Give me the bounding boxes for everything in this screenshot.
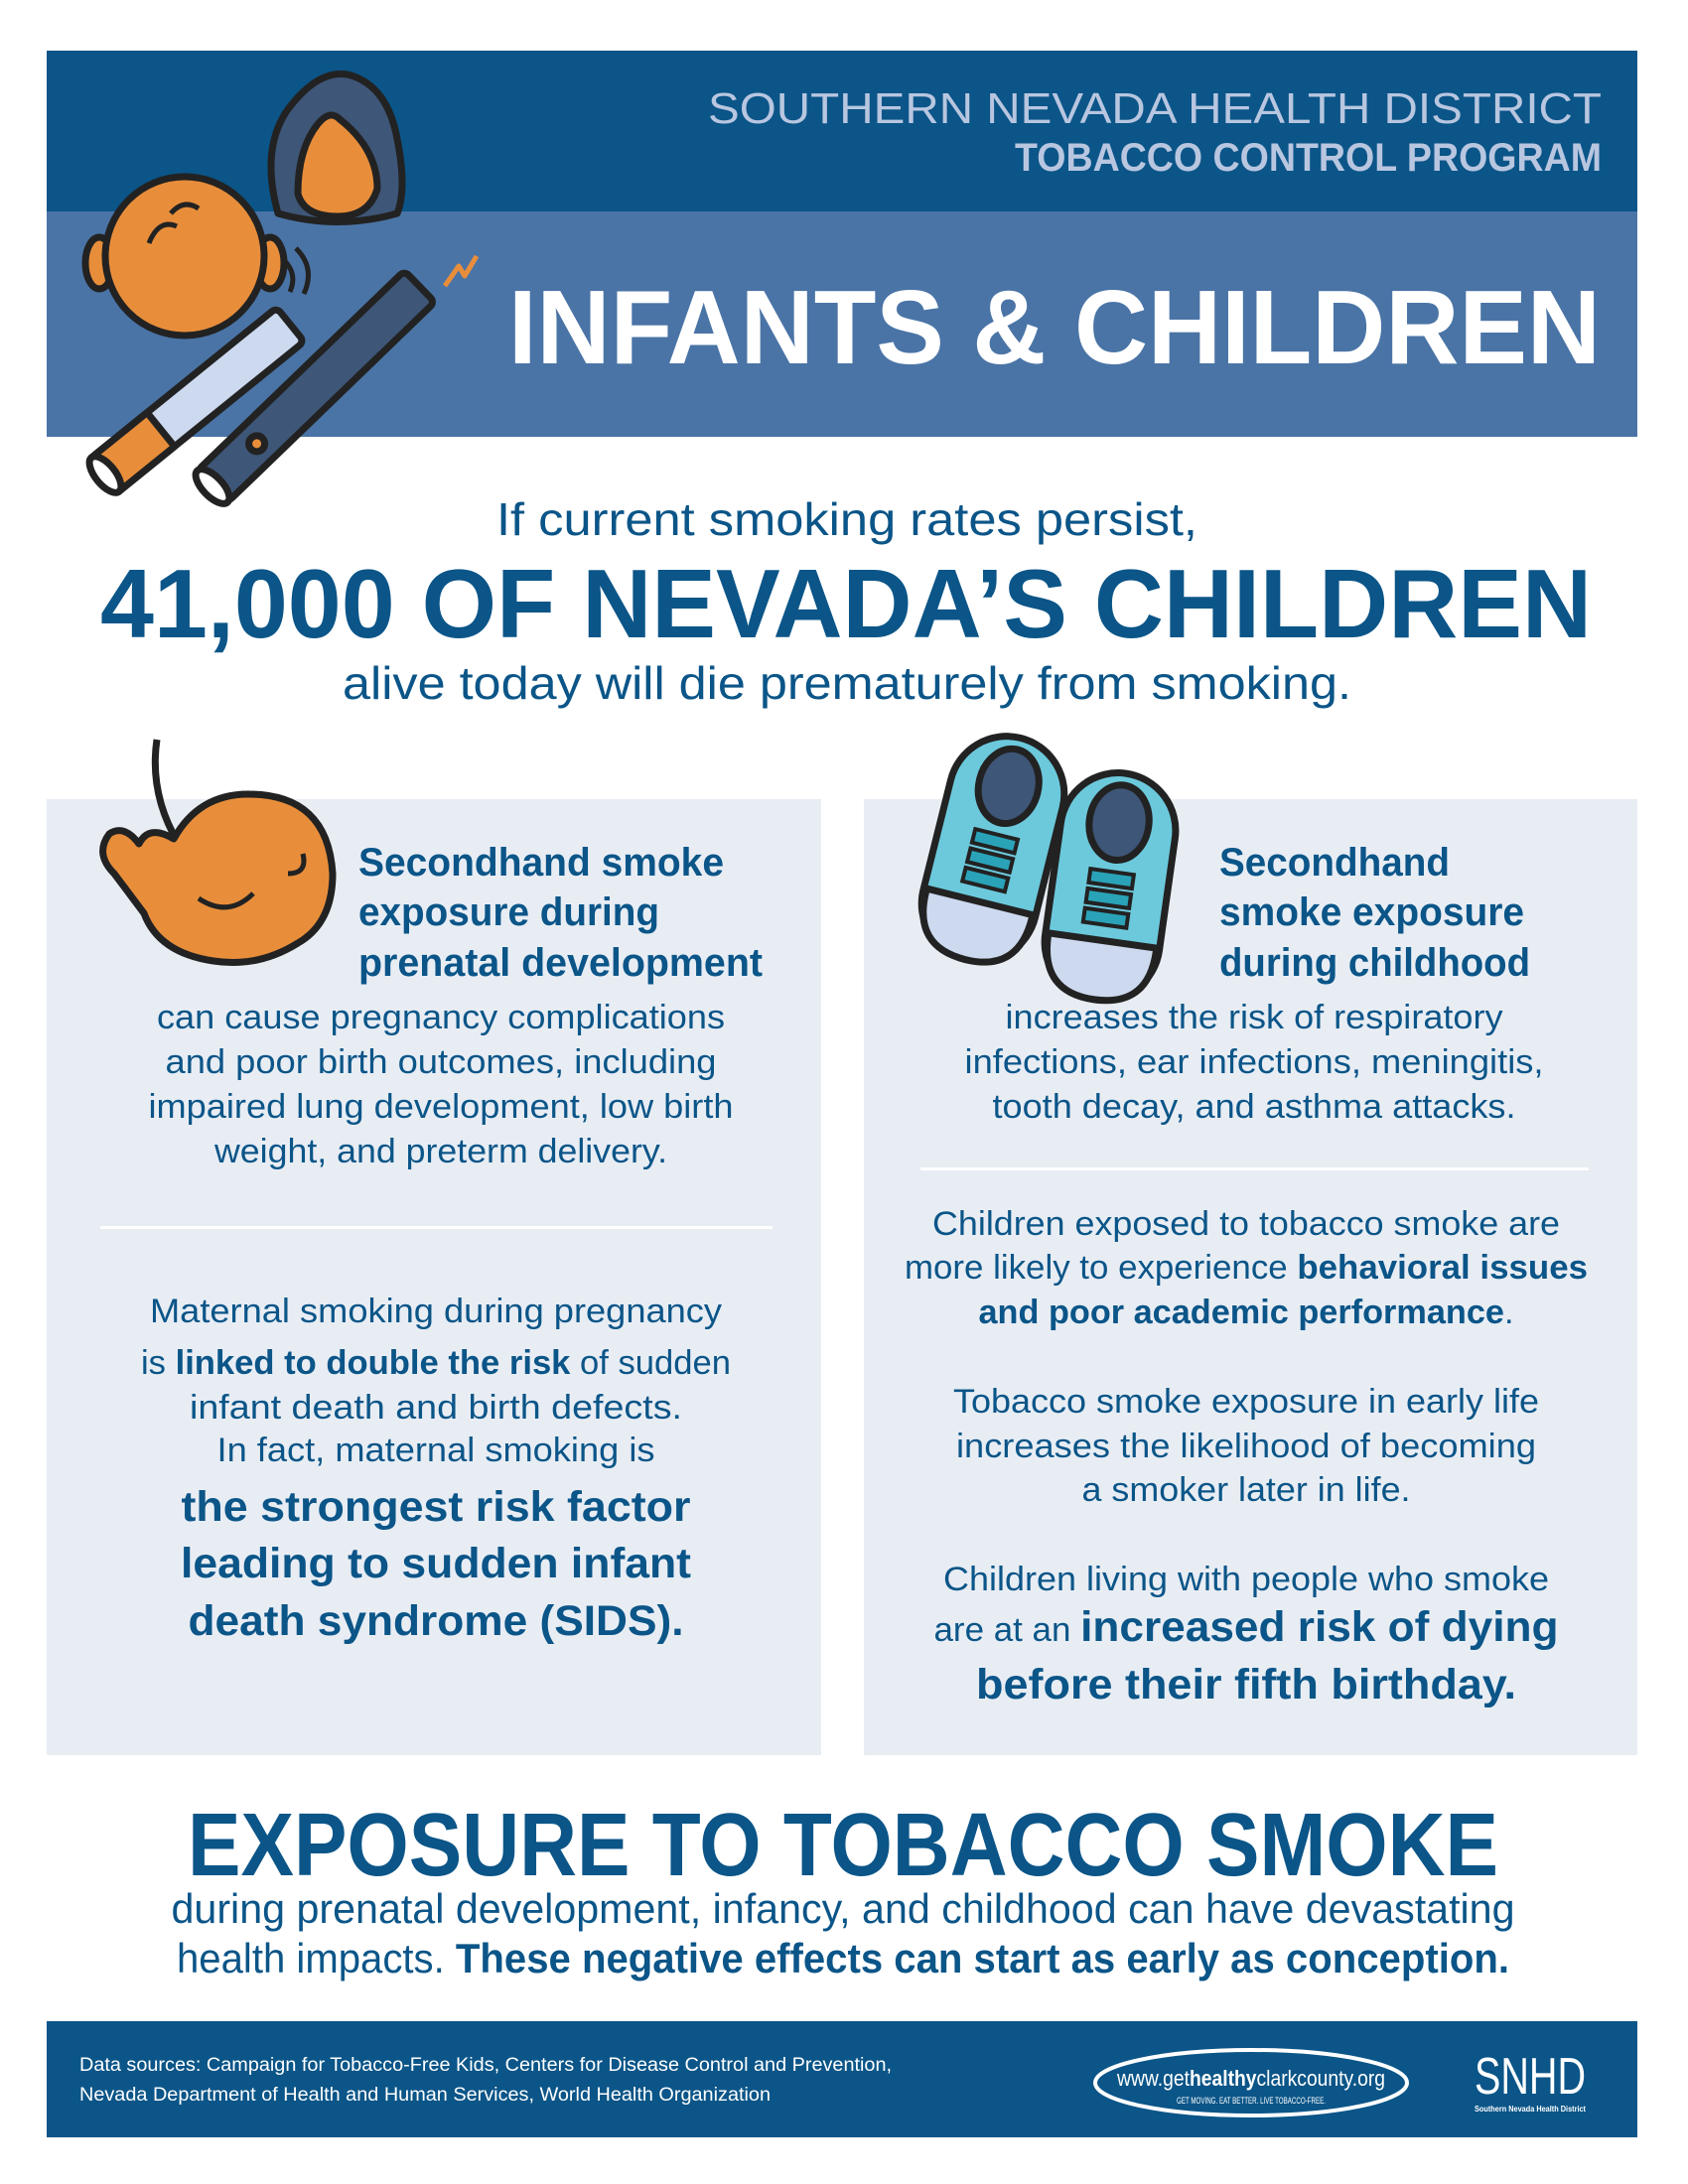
header program name: TOBACCO CONTROL PROGRAM xyxy=(1015,136,1602,180)
bottom text: during prenatal development, infancy, and childhood can have devastating xyxy=(171,1885,1515,1932)
body text: increases the risk of respiratory xyxy=(1005,999,1503,1036)
logo: gethealthyclarkcounty: GET MOVING. EAT BETTER. LIVE TOBACCO-FREE. xyxy=(1177,2096,1326,2106)
panel: prenatal xyxy=(47,740,821,1755)
heading xyxy=(1219,841,1530,985)
dying risk text: before their fifth birthday. xyxy=(976,1661,1516,1708)
SIDS callout: the strongest risk factor xyxy=(181,1483,691,1531)
smoker later text xyxy=(953,1383,1539,1509)
maternal smoking text: Maternal smoking during pregnancy xyxy=(150,1293,722,1330)
maternal smoking text xyxy=(141,1293,731,1469)
data sources: Nevada Department of Health and Human Services, World Health Organization xyxy=(79,2085,771,2106)
icon: shoes xyxy=(910,724,1183,1008)
data sources xyxy=(79,2055,892,2106)
body text: infections, ear infections, meningitis, xyxy=(965,1043,1543,1081)
SIDS callout: leading to sudden infant xyxy=(181,1540,691,1587)
body text: impaired lung development, low birth xyxy=(149,1088,733,1126)
heading xyxy=(358,841,763,985)
intro line: If current smoking rates persist, xyxy=(496,493,1197,545)
heading: Secondhand xyxy=(1219,841,1450,885)
panel: childhood xyxy=(864,724,1637,1755)
icon: cigarette xyxy=(83,308,304,497)
body text: and poor birth outcomes, including xyxy=(165,1043,717,1081)
SIDS callout xyxy=(181,1483,691,1645)
maternal smoking text: In fact, maternal smoking is xyxy=(216,1432,655,1469)
title: INFANTS & CHILDREN xyxy=(508,269,1601,386)
header org name: SOUTHERN NEVADA HEALTH DISTRICT xyxy=(708,84,1602,133)
SIDS callout: death syndrome (SIDS). xyxy=(189,1597,683,1645)
behavioral text xyxy=(905,1205,1588,1331)
data sources: Data sources: Campaign for Tobacco-Free Kids, Centers for Disease Control and Prevention, xyxy=(79,2055,892,2076)
logo: gethealthyclarkcounty xyxy=(1095,2050,1407,2116)
logo: gethealthyclarkcounty: www.gethealthyclarkcounty.org xyxy=(1116,2066,1385,2091)
logo: SNHD xyxy=(1475,2048,1586,2114)
body text: weight, and preterm delivery. xyxy=(213,1133,667,1170)
dying risk text: are at an increased risk of dying xyxy=(933,1603,1559,1651)
heading: during childhood xyxy=(1219,941,1530,985)
behavioral text: Children exposed to tobacco smoke are xyxy=(932,1205,1560,1243)
maternal smoking text: infant death and birth defects. xyxy=(190,1389,682,1427)
icon: child head xyxy=(85,177,284,336)
footer xyxy=(47,2021,1637,2137)
headline subline: alive today will die prematurely from smoking. xyxy=(343,657,1351,709)
heading: exposure during xyxy=(358,890,659,934)
smoker later text: a smoker later in life. xyxy=(1082,1471,1410,1509)
icon: spark xyxy=(445,256,477,286)
bottom text xyxy=(171,1885,1515,1981)
icon: embryo xyxy=(103,740,333,963)
body text: can cause pregnancy complications xyxy=(157,999,725,1036)
maternal smoking text: is linked to double the risk of sudden xyxy=(141,1344,731,1382)
icon: child and woman heads with cigarettes xyxy=(83,73,477,509)
heading: prenatal development xyxy=(358,941,763,985)
smoker later text: Tobacco smoke exposure in early life xyxy=(953,1383,1539,1421)
icon: e-cigarette xyxy=(191,271,435,509)
behavioral text: and poor academic performance. xyxy=(979,1294,1513,1331)
heading: Secondhand smoke xyxy=(358,841,724,885)
dying risk text: Children living with people who smoke xyxy=(943,1561,1549,1598)
logo: SNHD: SNHD xyxy=(1475,2048,1586,2106)
headline stat: 41,000 OF NEVADA’S CHILDREN xyxy=(100,549,1592,658)
header band xyxy=(47,51,1637,437)
body text xyxy=(149,999,733,1170)
logo: SNHD: Southern Nevada Health District xyxy=(1475,2105,1586,2114)
smoker later text: increases the likelihood of becoming xyxy=(956,1428,1536,1465)
behavioral text: more likely to experience behavioral issues xyxy=(905,1249,1588,1287)
bottom headline: EXPOSURE TO TOBACCO SMOKE xyxy=(188,1796,1498,1895)
bottom text: health impacts. These negative effects can start as early as conception. xyxy=(177,1935,1509,1981)
icon: woman head xyxy=(271,73,402,222)
heading: smoke exposure xyxy=(1219,890,1524,934)
body text: tooth decay, and asthma attacks. xyxy=(993,1088,1515,1126)
dying risk text xyxy=(933,1561,1559,1708)
body text xyxy=(965,999,1543,1126)
